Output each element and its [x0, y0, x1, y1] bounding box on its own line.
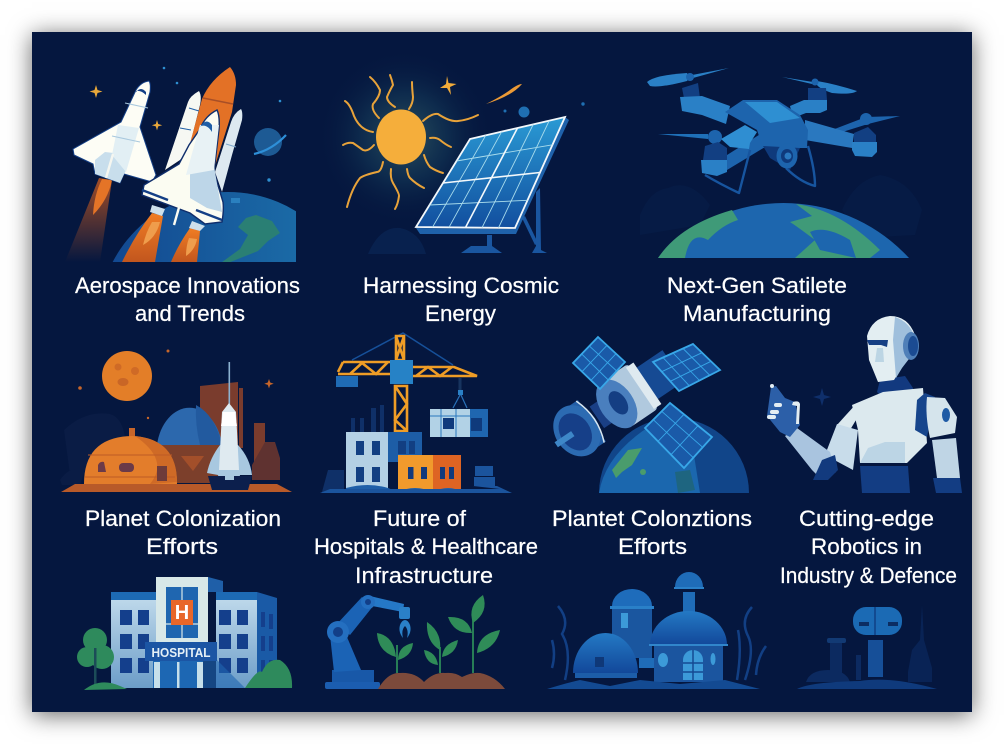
hospital building	[111, 577, 277, 688]
heading: cutting-edge robotics: Industry & Defence	[780, 563, 957, 588]
heading: future of hospitals: Hospitals & Healthcare	[314, 534, 538, 559]
solar panel stand	[461, 188, 547, 253]
shuttle: main	[142, 110, 223, 231]
small blue bubble	[504, 102, 585, 118]
faded robot neck	[868, 640, 883, 677]
panel: harnessing cosmic energy	[317, 49, 585, 254]
blue dome	[157, 408, 222, 445]
orange moon	[102, 351, 152, 401]
orange fuel tank	[189, 67, 236, 169]
heading: plantet colonztions efforts: Efforts	[618, 534, 687, 559]
panel: planet colonization	[60, 350, 292, 492]
crane	[336, 333, 477, 431]
prefab module	[430, 409, 488, 437]
robot left arm	[785, 403, 858, 480]
trees and bushes	[77, 628, 292, 690]
colony ground	[547, 680, 760, 689]
robot hand	[767, 384, 800, 437]
hospital H sign: H	[175, 602, 189, 624]
sun	[343, 75, 522, 209]
brown base	[160, 445, 218, 483]
robot torso	[852, 388, 927, 463]
heading: future of hospitals	[314, 506, 538, 588]
earth	[112, 192, 296, 262]
satellite body	[541, 344, 688, 467]
soil mounds	[378, 673, 505, 689]
heading: aerospace innovations: Aerospace Innovations	[75, 273, 300, 298]
ground haze	[368, 228, 426, 254]
orange dome habitat	[84, 428, 177, 484]
left dome	[573, 633, 654, 678]
hospital H sign	[171, 600, 193, 625]
panel: dome colony	[547, 572, 766, 689]
chimney and cap	[674, 572, 704, 612]
robot right arm	[915, 393, 962, 493]
heading: cutting-edge robotics: Robotics in	[811, 534, 922, 559]
heading: harnessing cosmic energy: Energy	[425, 301, 497, 326]
ghost towers	[322, 405, 384, 492]
earth	[599, 420, 749, 493]
panel: next-gen satellite manufacturing	[647, 68, 909, 258]
faded towers	[806, 605, 932, 682]
tower dome	[610, 589, 654, 658]
buildings	[346, 432, 461, 493]
flame: rear shuttle	[93, 179, 112, 215]
panel: aerospace innovations	[68, 66, 296, 262]
heading: future of hospitals: Future of	[373, 506, 467, 531]
brown towers	[200, 382, 280, 480]
sun glow	[317, 49, 493, 225]
rocket	[207, 362, 252, 490]
faded ground	[797, 680, 937, 689]
robot head	[867, 316, 919, 382]
heading: cutting-edge robotics: Cutting-edge	[799, 506, 934, 531]
infographic canvas	[61, 66, 962, 690]
robot arm	[325, 595, 411, 689]
drone skids	[705, 146, 815, 193]
heading: planet colonization efforts	[85, 506, 281, 559]
heading: plantet colonztions efforts: Plantet Colonztions	[552, 506, 752, 531]
booster: right	[215, 109, 242, 192]
faint star	[813, 388, 831, 406]
seedlings	[377, 595, 500, 673]
heading: aerospace innovations: and Trends	[135, 301, 245, 326]
seaweed	[552, 606, 766, 680]
planet with ring	[254, 128, 286, 156]
drone body	[725, 100, 808, 148]
ground	[61, 484, 292, 492]
panel: plantet colonization satellite	[553, 336, 749, 493]
flames: main shuttle	[122, 213, 200, 262]
heading: planet colonization efforts: Efforts	[146, 534, 218, 559]
solar panels	[573, 337, 720, 468]
hospital banner: HOSPITAL	[152, 645, 211, 660]
panel: faded robot	[797, 605, 937, 689]
background cloud haze	[640, 175, 922, 238]
panel: robotics	[767, 316, 962, 493]
main dome	[649, 611, 728, 682]
robot neck	[877, 376, 913, 403]
heading: next-gen satilete manufacturing: Manufacturing	[683, 301, 831, 326]
heading: harnessing cosmic energy: Harnessing Cosmic	[363, 273, 559, 298]
heading: planet colonization efforts: Planet Colonization	[85, 506, 281, 531]
solar panel	[416, 117, 569, 234]
heading: next-gen satilete manufacturing	[667, 273, 847, 326]
heading: cutting-edge robotics	[780, 506, 957, 588]
flame trail: rear shuttle	[65, 178, 112, 262]
shuttle: rear	[73, 81, 156, 183]
panel: hospital	[77, 577, 292, 690]
drone rotors	[647, 68, 900, 144]
robot	[767, 316, 962, 493]
drone camera	[763, 144, 800, 170]
drone	[647, 68, 900, 193]
haze hills	[60, 413, 126, 485]
faded robot head	[853, 607, 902, 635]
heading: plantet colonztions efforts	[552, 506, 752, 559]
heading: aerospace innovations	[75, 273, 300, 326]
stars	[78, 350, 274, 419]
panel: robot arm and plants	[325, 595, 505, 689]
brick stack and ground	[320, 466, 512, 493]
panel: future of hospitals and healthcare infrastructure	[320, 333, 512, 493]
stars	[90, 67, 281, 182]
heading: future of hospitals: Infrastructure	[355, 563, 493, 588]
earth	[658, 203, 909, 258]
drone motors and arms	[680, 83, 877, 176]
booster: left	[165, 91, 201, 170]
heading: harnessing cosmic energy	[363, 273, 559, 326]
heading: next-gen satilete manufacturing: Next-Gen Satilete	[667, 273, 847, 298]
